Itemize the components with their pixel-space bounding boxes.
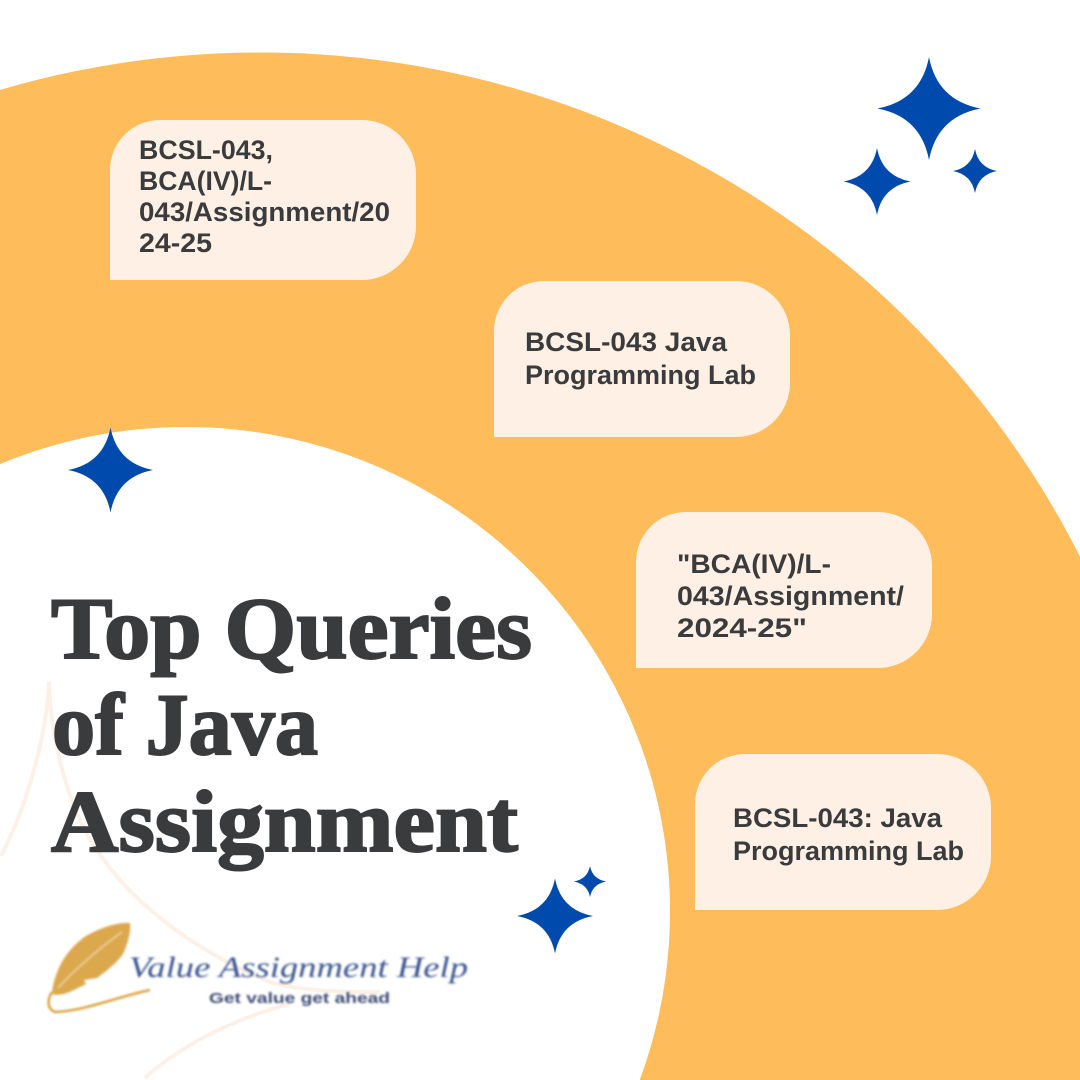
icon: sparkle cluster bottom <box>517 866 606 954</box>
card 1: BCSL-043, <box>139 135 273 165</box>
title <box>51 581 532 871</box>
logo tagline: Get value get ahead <box>209 990 390 1007</box>
card 4: BCSL-043: Java <box>733 803 943 833</box>
white inner circle <box>0 427 670 1080</box>
title: of Java <box>52 677 318 774</box>
card 1: 043/Assignment/20 <box>139 197 390 227</box>
card 4: Programming Lab <box>733 836 964 866</box>
icon: sparkle cluster top right <box>844 57 997 215</box>
card 2: Programming Lab <box>525 360 756 390</box>
card 3: 2024-25" <box>677 613 807 643</box>
card 1: BCA(IV)/L- <box>139 166 272 196</box>
card 2 <box>494 281 790 437</box>
card 3 <box>636 512 932 668</box>
card 2: BCSL-043 Java <box>525 327 728 357</box>
decorative faint arcs <box>1 682 380 1078</box>
card 3: "BCA(IV)/L- <box>677 549 831 579</box>
card 3: 043/Assignment/ <box>677 581 905 611</box>
card 4 <box>695 754 991 910</box>
card 1: 24-25 <box>139 228 212 258</box>
icon: feather <box>49 923 150 1012</box>
logo name: Value Assignment Help <box>129 951 468 984</box>
card 1 <box>110 120 416 280</box>
title: Top Queries <box>51 581 532 678</box>
icon: sparkle left <box>68 428 153 512</box>
title: Assignment <box>51 774 518 871</box>
logo <box>49 923 468 1012</box>
